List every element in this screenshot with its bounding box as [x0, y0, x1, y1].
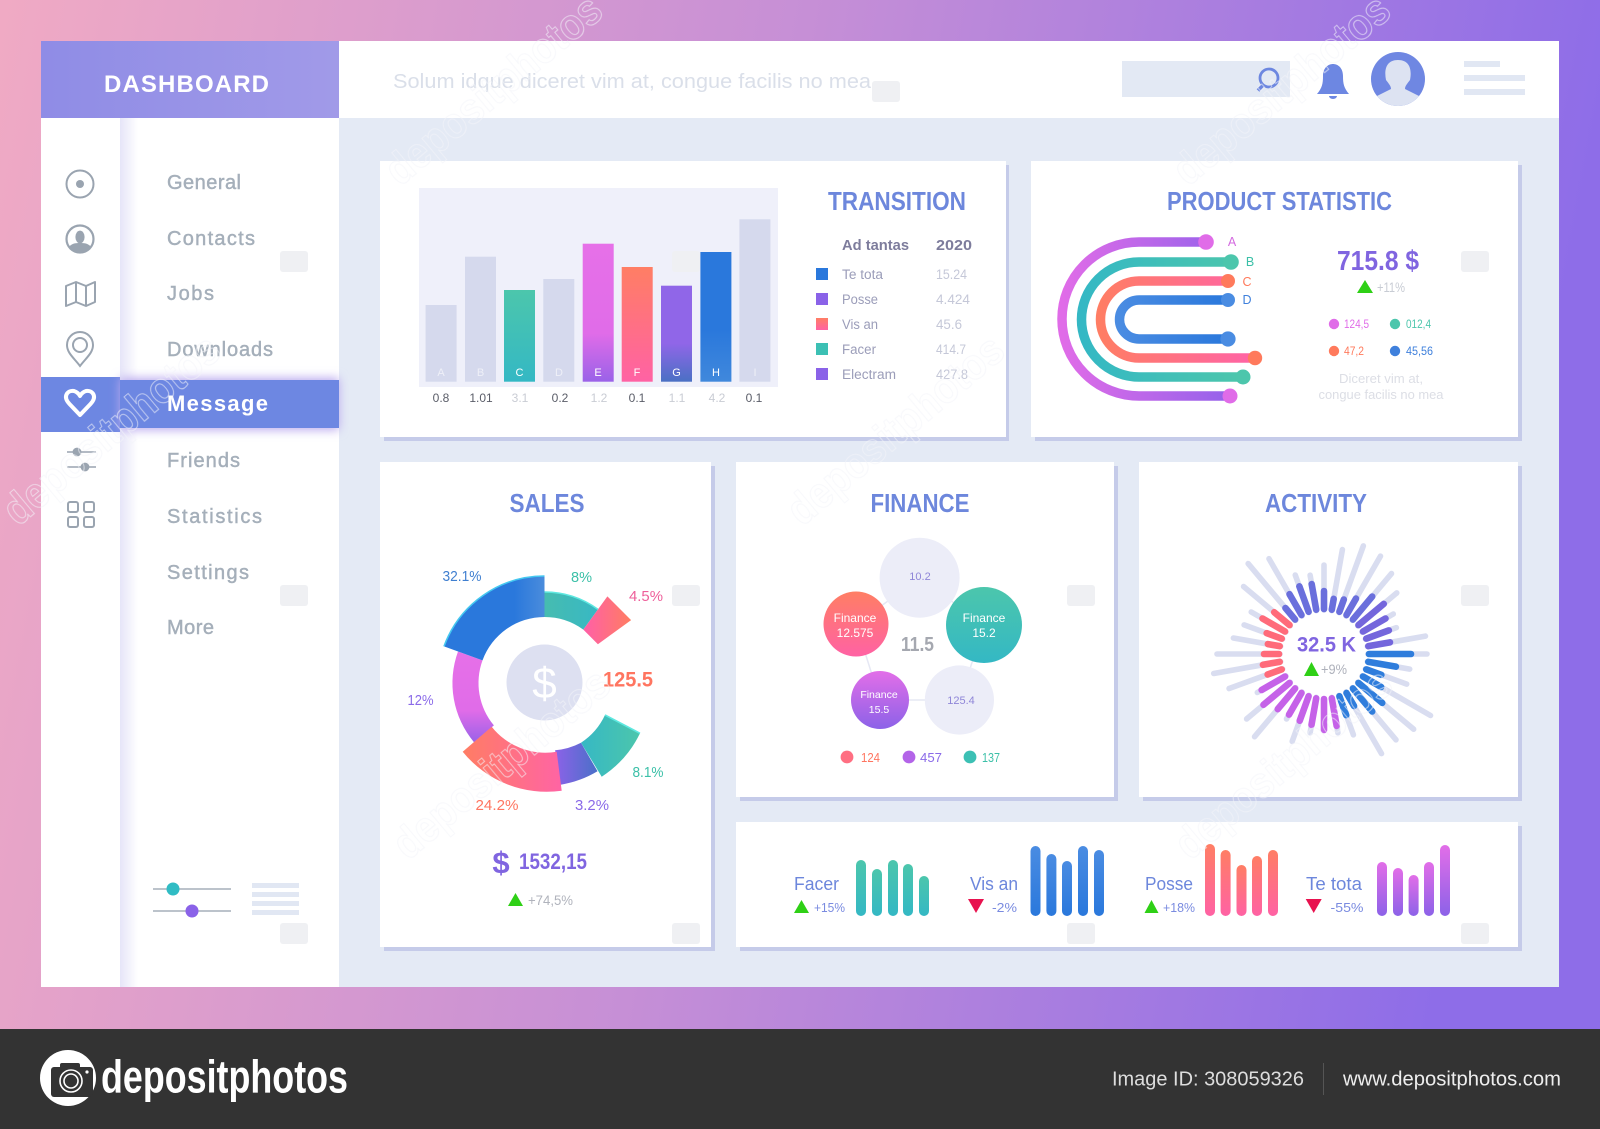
centre value: 32.5 K: [1297, 634, 1356, 656]
stat legend: 012,4: [1406, 319, 1432, 331]
sidebar: [41, 41, 339, 987]
finance legend: [841, 750, 1000, 765]
legend table: 4.424: [936, 292, 970, 307]
bar chart: 0.1: [629, 391, 646, 405]
bar chart: [419, 188, 778, 405]
mini chart: te tota: Te tota: [1306, 874, 1363, 894]
bar chart: A: [437, 367, 445, 379]
menu labels: Settings: [167, 562, 249, 584]
dollar centre: [506, 644, 582, 720]
stat legend: 47,2: [1344, 346, 1364, 358]
activity change: +9%: [1321, 661, 1347, 677]
bar chart: E: [594, 367, 602, 379]
bar chart: 0.2: [552, 391, 569, 405]
concentric arc chart: B: [1246, 255, 1254, 269]
slice labels: 3.2%: [575, 798, 609, 814]
bubble chart: [824, 538, 1022, 735]
bubble 125.4: 125.4: [947, 695, 975, 707]
bar chart: 4.2: [709, 391, 726, 405]
stat caption: [1318, 372, 1444, 402]
finance legend: 124: [861, 750, 880, 765]
bubble 15.5: Finance: [860, 689, 898, 701]
bar chart: 1.01: [469, 391, 493, 405]
panel: transition: [380, 161, 1009, 441]
slice labels: 12%: [408, 693, 434, 709]
legend table: 45.6: [936, 317, 962, 332]
menu labels: General: [167, 172, 241, 194]
legend table: 414.7: [936, 342, 966, 357]
heading: activity: ACTIVITY: [1265, 488, 1367, 518]
bar chart: 0.8: [433, 391, 450, 405]
watermark camera marks: [280, 81, 1489, 944]
mini chart: posse: [1144, 844, 1278, 916]
heading: finance: FINANCE: [870, 488, 970, 518]
panel: finance: [736, 462, 1118, 801]
radial bar chart: [1214, 546, 1431, 754]
stat caption: congue facilis no mea: [1318, 388, 1444, 402]
activity change: [1304, 661, 1347, 677]
concentric arc chart: C: [1242, 275, 1252, 289]
bar chart: I: [753, 367, 757, 379]
sales change: +74,5%: [528, 892, 573, 908]
footer bar: [0, 1029, 1600, 1129]
panel: product statistic: [1031, 161, 1522, 441]
sales total: $: [492, 845, 510, 880]
dashboard heading: [41, 41, 339, 118]
watermark: depositphotos: [777, 325, 1014, 535]
bubble 15.2: [946, 587, 1022, 663]
bar chart: B: [477, 367, 484, 379]
search box: [1122, 61, 1290, 97]
logo wordmark: depositphotos: [101, 1050, 348, 1102]
finance legend: 137: [982, 750, 1000, 765]
bubble 15.5: 15.5: [869, 704, 889, 716]
mini chart: facer: +15%: [814, 900, 845, 915]
mini chart: vis an: -2%: [992, 900, 1017, 915]
icon: location pin: [67, 332, 93, 366]
donut chart: [408, 569, 664, 814]
image id: Image ID: 308059326: [1112, 1068, 1304, 1090]
bar chart: 0.1: [746, 391, 763, 405]
centre value: 11.5: [901, 634, 934, 656]
menu labels: Statistics: [167, 506, 262, 528]
sales change: [508, 892, 573, 908]
slice labels: 32.1%: [442, 569, 482, 585]
bubble 12.575: Finance: [834, 611, 877, 625]
menu labels: Downloads: [167, 339, 273, 361]
bubble 15.5: [851, 671, 909, 729]
legend table: 2020: [936, 237, 972, 254]
bar chart: C: [516, 367, 524, 379]
change indicator: [1357, 279, 1405, 295]
panel: sales: [380, 462, 715, 951]
bar chart: 3.1: [512, 391, 529, 405]
stat caption: Diceret vim at,: [1339, 372, 1423, 386]
bar chart: 1.1: [669, 391, 686, 405]
concentric arc chart: D: [1242, 293, 1252, 307]
mini chart: te tota: [1306, 845, 1450, 916]
slice labels: 8%: [571, 570, 592, 586]
menu labels: Contacts: [167, 228, 255, 250]
heading: sales: SALES: [510, 488, 584, 518]
mini chart: te tota: -55%: [1330, 900, 1364, 915]
icon: map: [66, 282, 95, 306]
mini chart: posse: +18%: [1163, 900, 1195, 915]
icon: grid: [68, 502, 94, 527]
bar chart: F: [634, 367, 641, 379]
slice labels: 8.1%: [632, 765, 664, 781]
mini chart: posse: Posse: [1145, 874, 1193, 894]
bubble 10.2: 10.2: [909, 571, 931, 583]
heading: product statistic: PRODUCT STATISTIC: [1167, 186, 1392, 216]
bubble 12.575: 12.575: [837, 626, 874, 640]
legend table: Facer: [842, 342, 876, 357]
menu labels: Jobs: [167, 283, 214, 305]
legend table: Te tota: [842, 267, 883, 282]
menu labels: More: [167, 617, 214, 639]
watermark: depositphotos: [1165, 659, 1402, 869]
sales total: [492, 845, 587, 880]
dashboard heading: DASHBOARD: [104, 71, 269, 98]
sidebar slider controls: [153, 882, 231, 918]
logo mark: [40, 1050, 96, 1106]
slice labels: 4.5%: [629, 589, 663, 605]
bar chart: 1.2: [591, 391, 608, 405]
bubble 15.2: 15.2: [972, 626, 996, 640]
change indicator: +11%: [1377, 279, 1405, 295]
menu labels: Friends: [167, 450, 240, 472]
watermark: depositphotos: [0, 325, 230, 535]
legend table: 427.8: [936, 367, 968, 382]
active menu bar: [120, 380, 339, 428]
mini chart: vis an: [968, 846, 1104, 916]
legend table: Posse: [842, 292, 878, 307]
bubble 12.575: [824, 592, 888, 656]
watermark: [0, 0, 1402, 869]
total value: 715.8 $: [1337, 245, 1419, 276]
bubble 125.4: [925, 665, 994, 735]
sidebar list lines: [252, 883, 299, 915]
bar chart: G: [672, 367, 681, 379]
panel: activity: [1139, 462, 1522, 801]
legend table: 15.24: [936, 267, 967, 282]
top header bar: [339, 41, 1559, 118]
bubble 15.2: Finance: [963, 611, 1006, 625]
header tagline: Solum idque diceret vim at, congue facilis no mea: [393, 71, 872, 93]
mini chart: facer: Facer: [794, 874, 839, 894]
stat legend: 45,56: [1406, 346, 1433, 358]
stat legend: [1329, 319, 1433, 358]
icon: hamburger menu: [1464, 61, 1525, 95]
icon: bell: [1317, 64, 1349, 99]
bar chart: H: [712, 367, 720, 379]
icon: user avatar: [1371, 52, 1425, 106]
footer divider: [1323, 1063, 1324, 1095]
bar chart: D: [555, 367, 563, 379]
slice labels: 24.2%: [476, 798, 519, 814]
panel: mini bar charts: [736, 822, 1522, 951]
menu labels: Message: [167, 391, 268, 416]
website: www.depositphotos.com: [1342, 1068, 1561, 1090]
legend table: Vis an: [842, 317, 878, 332]
menu labels: [167, 172, 273, 639]
icon: sliders: [67, 448, 96, 471]
active menu bar glow: [120, 378, 339, 430]
watermark: depositphotos: [383, 659, 620, 869]
slice labels: [408, 569, 664, 814]
menu item: active icon tile: [41, 377, 120, 432]
finance legend: 457: [920, 750, 942, 765]
legend table: [816, 237, 972, 382]
legend table: Ad tantas: [842, 237, 909, 254]
icon: heart: [66, 391, 94, 415]
stat legend: 124,5: [1344, 319, 1369, 331]
dollar centre: $: [532, 659, 557, 708]
mini chart: facer: [794, 860, 929, 916]
centre value: 125.5: [603, 668, 653, 692]
icon: contact: [66, 226, 94, 252]
icon: target: [66, 170, 94, 198]
content area background: [339, 118, 1559, 987]
concentric arc chart: A: [1228, 235, 1237, 249]
bubble 10.2: [880, 538, 960, 618]
heading: transition: TRANSITION: [828, 186, 966, 216]
mini chart: vis an: Vis an: [970, 874, 1018, 894]
legend table: Electram: [842, 367, 896, 382]
sales total: 1532,15: [519, 849, 587, 874]
concentric arc chart: [1062, 234, 1262, 404]
